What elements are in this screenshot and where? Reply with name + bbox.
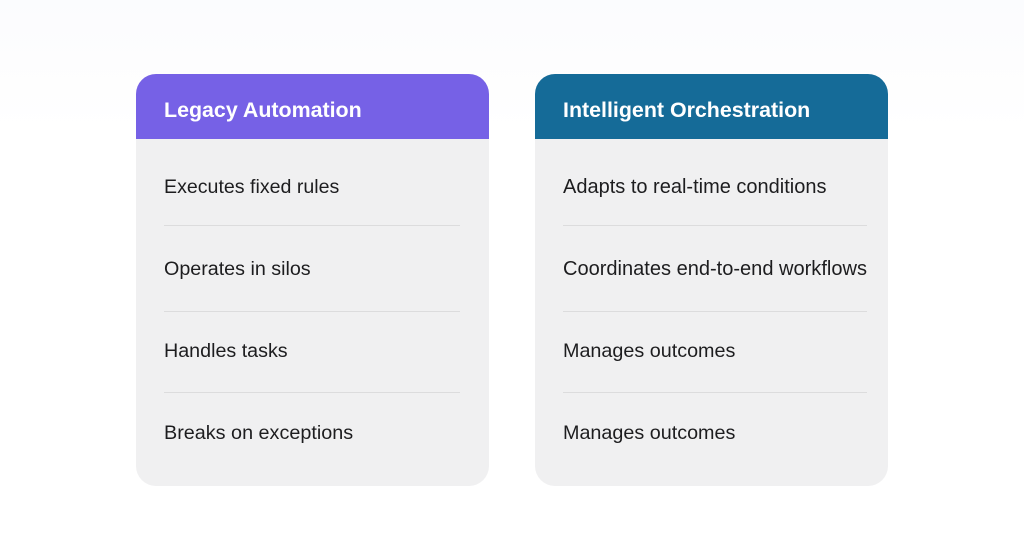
text: operates in silos: Operates in silos bbox=[164, 258, 311, 280]
text: adapts to real-time conditions: Adapts to real-time conditions bbox=[563, 176, 826, 198]
panel: legacy automation bbox=[136, 74, 489, 486]
header: legacy automation bbox=[136, 74, 489, 139]
heading: legacy automation: Legacy Automation bbox=[164, 98, 362, 122]
text: coordinates end-to-end workflows: Coordinates end-to-end workflows bbox=[563, 258, 867, 280]
text: handles tasks: Handles tasks bbox=[164, 340, 288, 362]
header: intelligent orchestration bbox=[535, 74, 888, 139]
text: manages outcomes: Manages outcomes bbox=[563, 340, 735, 362]
text: breaks on exceptions: Breaks on exceptions bbox=[164, 422, 353, 444]
panel: intelligent orchestration bbox=[535, 74, 888, 486]
text: executes fixed rules: Executes fixed rules bbox=[164, 176, 339, 198]
text: manages outcomes (repeat): Manages outcomes bbox=[563, 422, 735, 444]
heading: intelligent orchestration: Intelligent Orchestration bbox=[563, 98, 810, 122]
